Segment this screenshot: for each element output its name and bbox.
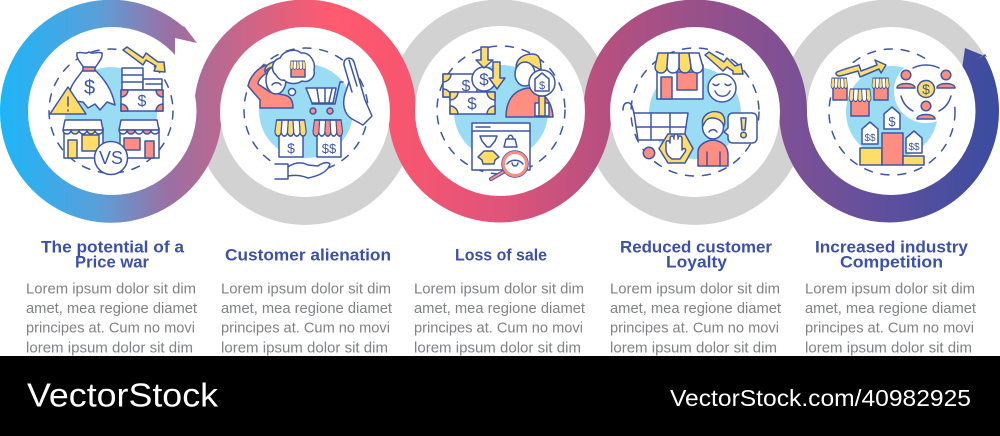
icon: person with magnifier: $ (539, 80, 545, 92)
icon: banknotes (443, 74, 495, 114)
text block: reduced customer loyalty (610, 282, 781, 356)
panel: customer alienation (221, 48, 392, 356)
icon: worried man (248, 61, 293, 108)
text block: increased industry competition: lorem ipsum dolor sit dim (805, 340, 972, 356)
icon: stop hand hexagon (659, 134, 693, 163)
icon: shop browser window (472, 123, 530, 179)
footer bar (0, 356, 1000, 436)
title: price war: The potential of a (41, 238, 185, 256)
icon: money stack: $ (138, 93, 147, 110)
text block: customer alienation: Lorem ipsum dolor sit dim (221, 282, 391, 298)
text block: increased industry competition: principes at. Cum no movi (805, 320, 974, 336)
icon: shopping basket cart (623, 103, 688, 159)
icon: right store (119, 120, 159, 158)
text block: loss of sale: Lorem ipsum dolor sit dim (414, 282, 584, 298)
icon: podium with price tags (860, 107, 924, 165)
icon: shopping cart (306, 82, 343, 114)
text block: customer alienation: principes at. Cum no movi (221, 320, 390, 336)
panel: price war (26, 47, 197, 356)
icon: price war (49, 47, 173, 174)
grey ribbon segments (208, 13, 972, 211)
ribbon start arrow (165, 26, 197, 58)
icon: thought bubble (273, 50, 314, 96)
panel: increased industry competition (805, 49, 976, 356)
title: reduced customer loyalty: Reduced customer (620, 238, 772, 256)
icon: people around coin: $ (922, 81, 930, 97)
text block: reduced customer loyalty: Lorem ipsum dolor sit dim (610, 282, 780, 298)
text block: increased industry competition: amet, mea regione diamet (805, 301, 976, 317)
icon: expensive store: $$ (322, 141, 337, 156)
text block: customer alienation (221, 282, 392, 356)
text block: price war: Lorem ipsum dolor sit dim (26, 282, 196, 298)
icon: cheap store: $ (287, 140, 295, 156)
icon: open hand (275, 163, 330, 179)
text block: loss of sale (414, 282, 585, 356)
title: price war: Price war (75, 252, 149, 272)
icon: reduced loyalty (623, 48, 759, 176)
icon: falling arrow (705, 52, 743, 74)
title: increased industry competition (815, 238, 969, 272)
icon: podium with price tags: $ (888, 114, 896, 129)
icon: banknotes: $ (462, 78, 471, 95)
text block: loss of sale: amet, mea regione diamet (414, 301, 585, 317)
icon: industry competition (829, 49, 958, 175)
footer brand: VectorStock (27, 377, 219, 414)
text block: loss of sale: principes at. Cum no movi (414, 320, 583, 336)
icon: podium with price tags: $$ (908, 142, 920, 153)
title: price war (41, 238, 185, 272)
panel: loss of sale (414, 46, 585, 356)
icon: warning triangle (50, 87, 86, 114)
title: increased industry competition: Competition (840, 252, 943, 272)
icon: sad man (698, 112, 728, 166)
title: loss of sale: Loss of sale (455, 246, 547, 264)
text block: reduced customer loyalty: principes at. Cum no movi (610, 320, 779, 336)
icon: loss of sale (437, 46, 565, 179)
title: reduced customer loyalty (620, 238, 772, 272)
icon: falling arrow (123, 47, 165, 72)
text block: increased industry competition (805, 282, 976, 356)
icon: stop hand (344, 58, 372, 125)
text block: reduced customer loyalty: amet, mea regione diamet (610, 301, 781, 317)
winding ribbon (14, 13, 987, 211)
icon: versus badge: VS (99, 148, 123, 168)
text block: price war: principes at. Cum no movi (26, 320, 195, 336)
text block: price war (26, 282, 197, 356)
text block: increased industry competition: Lorem ipsum dolor sit dim (805, 282, 975, 298)
icon: left store (63, 120, 103, 158)
text block: customer alienation: amet, mea regione diamet (221, 301, 392, 317)
title: increased industry competition: Increased industry (815, 238, 969, 256)
text block: customer alienation: lorem ipsum dolor sit dim (221, 340, 388, 356)
icon: coin with arrows: $ (479, 70, 489, 89)
ribbon end arrow (962, 48, 987, 69)
text block: reduced customer loyalty: lorem ipsum dolor sit dim (610, 340, 777, 356)
icon: alert speech bubble (724, 113, 757, 143)
text block: price war: amet, mea regione diamet (26, 301, 197, 317)
icon: small stores (831, 78, 889, 116)
icon: rising arrow (836, 60, 886, 77)
icon: smiley face (708, 74, 736, 102)
panel: reduced customer loyalty (610, 48, 781, 356)
icon: banknotes: $ (467, 94, 477, 113)
icon: customer alienation (244, 48, 372, 179)
icon: money bag: $ (84, 77, 95, 99)
text block: price war: lorem ipsum dolor sit dim (26, 340, 193, 356)
footer image id: VectorStock.com/40982925 (670, 385, 971, 411)
icon: podium with price tags: $$ (864, 133, 876, 144)
gradient ribbon (14, 14, 985, 209)
title: customer alienation: Customer alienation (225, 246, 391, 264)
icon: store (655, 53, 703, 99)
title: reduced customer loyalty: Loyalty (666, 252, 728, 272)
inner white circles (28, 26, 976, 197)
text block: loss of sale: lorem ipsum dolor sit dim (414, 340, 581, 356)
